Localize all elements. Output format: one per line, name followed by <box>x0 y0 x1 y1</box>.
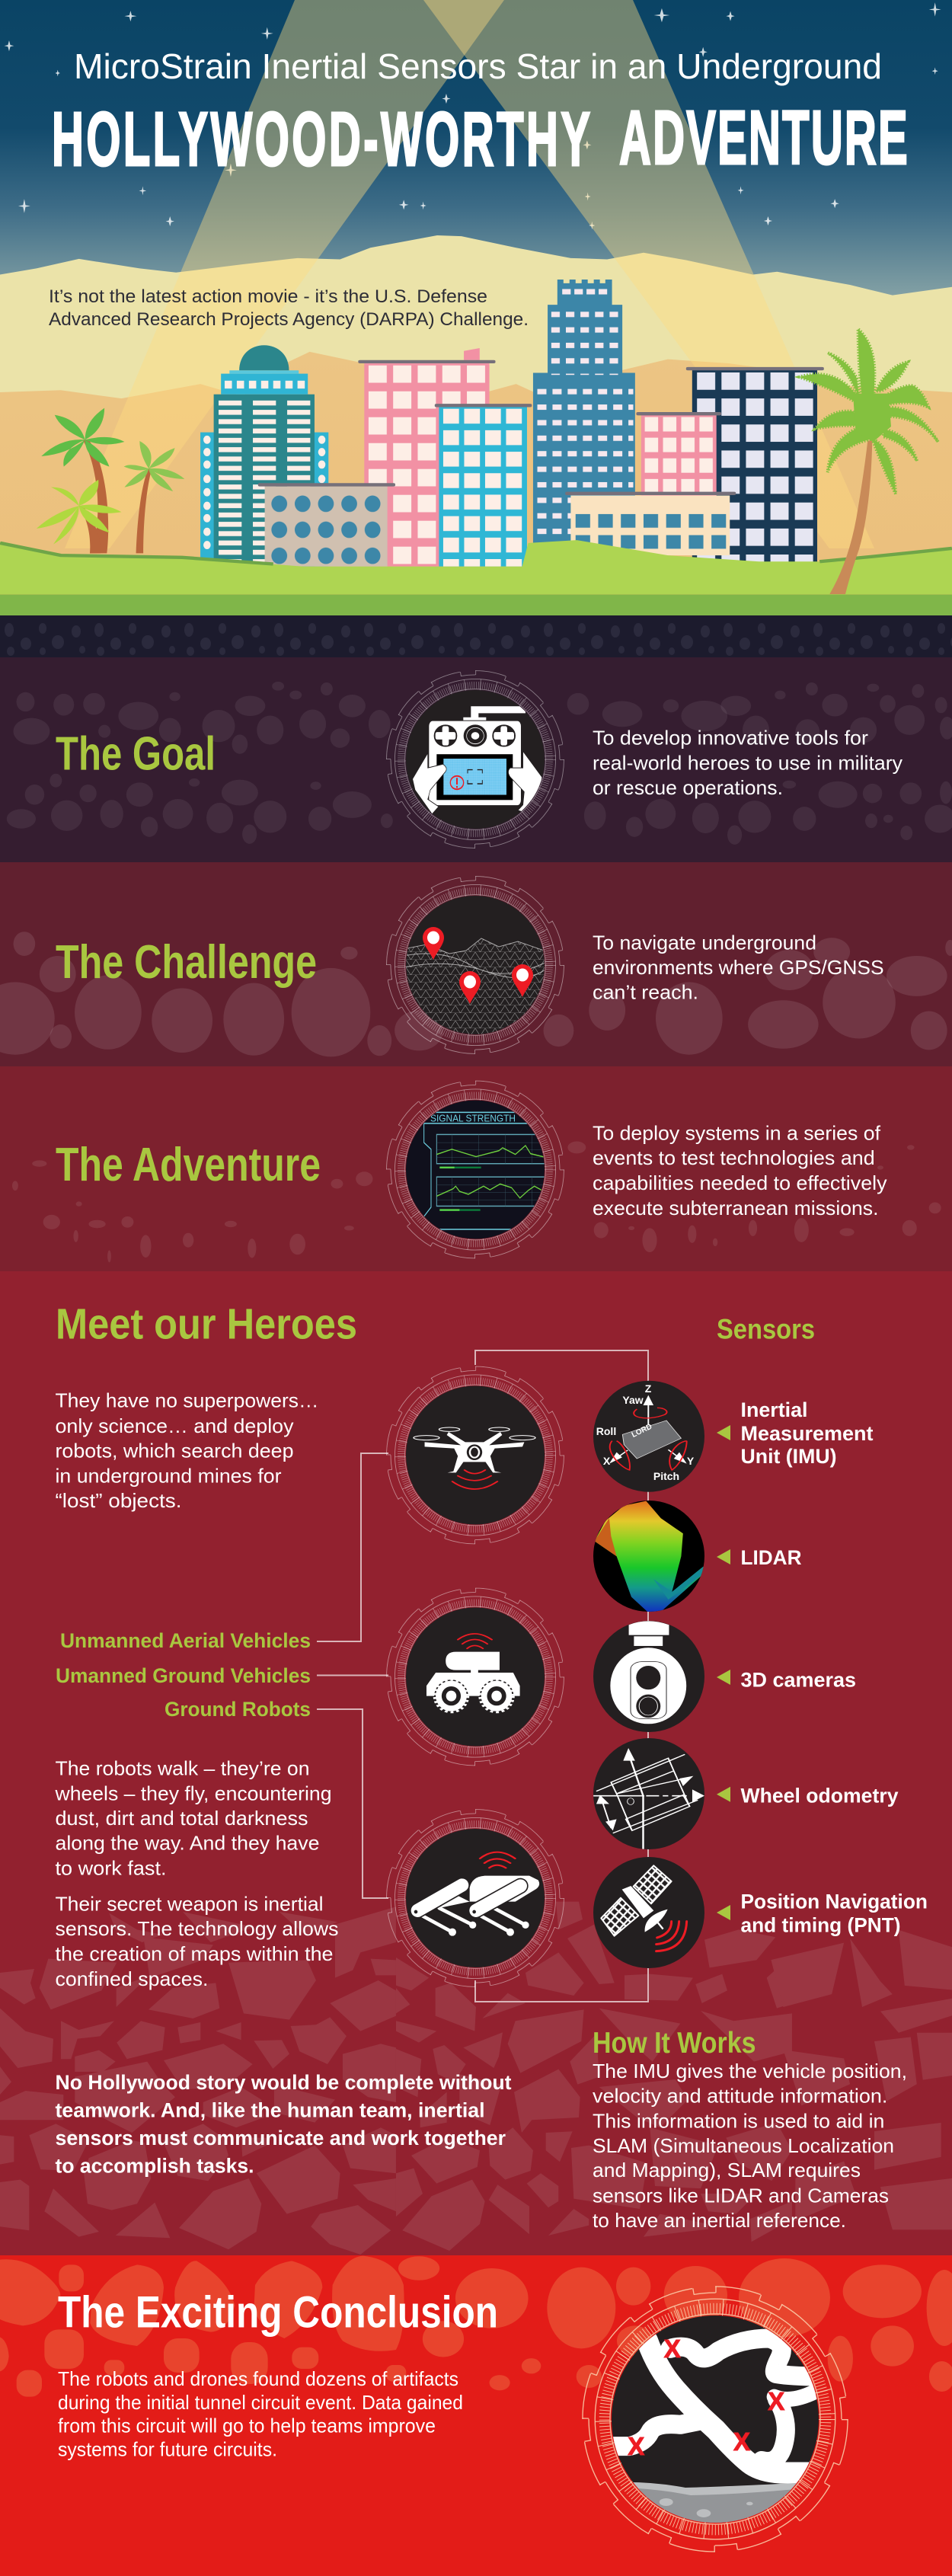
how it works: sensors like LIDAR and Cameras <box>593 2184 889 2207</box>
robots text: along the way. And they have <box>55 1831 320 1854</box>
icon: ground vehicle <box>387 1588 564 1766</box>
sensor: wheel odometry <box>593 1738 704 1849</box>
sensor labels: 3D cameras <box>740 1668 856 1691</box>
sensor: IMU: Y <box>687 1455 695 1467</box>
goal description: real-world heroes to use in military <box>593 751 902 774</box>
intro text: robots, which search deep <box>55 1440 294 1462</box>
grass hill <box>0 540 952 595</box>
panel: the exciting conclusion <box>0 2255 952 2576</box>
intro text: It’s not the latest action movie - it’s the U.S. Defense <box>49 286 487 307</box>
icon: walking robot <box>387 1810 564 1986</box>
rock flakes <box>12 1142 941 1262</box>
goal description <box>593 727 902 799</box>
building: cyan tower <box>435 404 532 567</box>
how it works: SLAM (Simultaneous Localization <box>593 2134 894 2157</box>
how it works: This information is used to aid in <box>593 2110 884 2133</box>
heading: The Goal <box>56 727 216 780</box>
building: tan block with round windows <box>258 483 395 567</box>
how it works: The IMU gives the vehicle position, <box>593 2060 907 2082</box>
icon: signal strength monitor <box>387 1081 564 1258</box>
hero category labels <box>56 1629 311 1721</box>
intro text <box>55 1389 318 1512</box>
artifact markers: X <box>733 2427 750 2456</box>
building: teal domed tower <box>200 345 328 567</box>
sensor labels: LIDAR <box>740 1546 801 1569</box>
adventure description <box>593 1121 887 1219</box>
sensor: IMU: Z <box>645 1382 652 1395</box>
teamwork text: teamwork. And, like the human team, inertial <box>55 2099 484 2122</box>
how it works: to have an inertial reference. <box>593 2209 846 2232</box>
ground strip <box>0 595 952 616</box>
robots text <box>54 1756 331 1879</box>
hero category labels: Unmanned Aerial Vehicles <box>60 1629 311 1652</box>
stone texture <box>0 1902 952 2255</box>
sensor: IMU: Pitch <box>653 1470 679 1482</box>
rock texture <box>0 932 952 1056</box>
icon: signal strength monitor: SIGNAL STRENGTH <box>430 1112 516 1124</box>
sensor labels: Measurement <box>740 1422 873 1445</box>
robots text: dust, dirt and total darkness <box>55 1807 308 1830</box>
heading: The Exciting Conclusion <box>58 2288 498 2338</box>
sensor: positioning satellite <box>593 1857 704 1968</box>
robots text: wheels – they fly, encountering <box>54 1782 331 1805</box>
heading: Meet our Heroes <box>56 1299 357 1348</box>
goal description: or rescue operations. <box>593 776 783 799</box>
heading: The Adventure <box>56 1139 321 1191</box>
city buildings <box>0 280 952 616</box>
sensor labels: Inertial <box>740 1398 807 1421</box>
goal description: To develop innovative tools for <box>593 727 868 749</box>
challenge description <box>593 931 884 1004</box>
intro text: in underground mines for <box>55 1464 282 1487</box>
intro text: “lost” objects. <box>55 1489 181 1512</box>
how it works: How It Works <box>593 2027 756 2060</box>
title line: MicroStrain Inertial Sensors Star in an Underground <box>74 46 882 86</box>
teamwork text: sensors must communicate and work together <box>55 2127 506 2149</box>
sensor: IMU: Yaw <box>622 1394 644 1406</box>
rock texture <box>7 682 952 845</box>
icon: tunnel map <box>583 2287 848 2552</box>
title: Hollywood-worthy adventure: ADVENTURE <box>619 96 908 181</box>
adventure description: To deploy systems in a series of <box>593 1121 881 1144</box>
intro text <box>49 286 529 330</box>
building: blue tower <box>533 280 635 546</box>
orange foothills <box>0 352 952 595</box>
secret weapon text: Their secret weapon is inertial <box>55 1892 323 1915</box>
pale mountain range <box>0 235 952 595</box>
secret weapon text: confined spaces. <box>55 1967 209 1990</box>
conclusion text: from this circuit will go to help teams improve <box>58 2415 436 2437</box>
artifact markers: X <box>664 2335 681 2363</box>
dark rock strip <box>0 615 952 658</box>
intro text: only science… and deploy <box>55 1414 294 1437</box>
challenge description: To navigate underground <box>593 931 816 954</box>
building: cream block <box>565 492 736 555</box>
adventure description: events to test technologies and <box>593 1146 875 1169</box>
sensor labels: and timing (PNT) <box>740 1913 900 1936</box>
panel: the challenge <box>0 862 952 1067</box>
teamwork text: to accomplish tasks. <box>55 2155 254 2178</box>
secret weapon text <box>55 1892 338 1990</box>
artifact markers: X <box>628 2432 644 2460</box>
building: pink tower <box>358 348 496 567</box>
teamwork text <box>55 2071 512 2178</box>
panel: meet our heroes <box>0 1271 952 2255</box>
sensor labels: Position Navigation <box>740 1890 928 1913</box>
robots text: to work fast. <box>55 1856 166 1879</box>
icon: wireframe terrain with pins <box>387 877 564 1053</box>
hero category labels: Ground Robots <box>165 1698 311 1721</box>
sensor: 3D camera <box>593 1621 704 1732</box>
tunnels <box>607 2338 823 2473</box>
how it works: and Mapping), SLAM requires <box>593 2159 861 2181</box>
stars <box>5 2 941 229</box>
panel: the adventure <box>0 1066 952 1271</box>
robots text: The robots walk – they’re on <box>55 1756 309 1779</box>
title: Hollywood-worthy adventure: HOLLYWOOD-WORTHY <box>52 97 590 182</box>
panel: the goal <box>0 657 952 862</box>
teamwork text: No Hollywood story would be complete without <box>55 2071 512 2094</box>
title: Hollywood-worthy adventure <box>52 96 908 182</box>
connector lines <box>317 1350 648 2002</box>
adventure description: execute subterranean missions. <box>593 1197 879 1219</box>
sensor: IMU: Roll <box>596 1425 616 1437</box>
large palm tree <box>799 329 938 594</box>
conclusion text: systems for future circuits. <box>58 2437 277 2460</box>
conclusion text <box>58 2367 463 2460</box>
conclusion text: The robots and drones found dozens of artifacts <box>58 2367 458 2390</box>
sensor labels <box>740 1398 928 1936</box>
sensor: IMU <box>593 1381 704 1492</box>
sensor: IMU: LORD <box>631 1423 653 1440</box>
sensor pointer arrows <box>717 1425 730 1920</box>
icon: remote controller with hands <box>387 671 564 848</box>
sensor labels: Unit (IMU) <box>740 1445 836 1468</box>
heading: The Challenge <box>56 936 317 989</box>
panel: hero city scene <box>0 0 952 616</box>
challenge description: can’t reach. <box>593 981 698 1004</box>
how it works <box>593 2027 907 2232</box>
scenery and skyline <box>0 235 952 595</box>
sensor labels: Wheel odometry <box>740 1784 899 1807</box>
hero category labels: Umanned Ground Vehicles <box>56 1664 311 1687</box>
adventure description: capabilities needed to effectively <box>593 1171 887 1194</box>
icon: aerial drone <box>387 1366 564 1544</box>
sensor: IMU: X <box>603 1455 611 1467</box>
intro text: Advanced Research Projects Agency (DARPA) Challenge. <box>49 309 529 330</box>
map pins <box>423 927 533 1004</box>
artifact markers <box>628 2335 784 2460</box>
how it works: velocity and attitude information. <box>593 2084 887 2107</box>
intro text: They have no superpowers… <box>55 1389 318 1412</box>
sensors heading: Sensors <box>717 1313 815 1345</box>
sensor: LIDAR scan <box>593 1501 704 1612</box>
secret weapon text: the creation of maps within the <box>55 1942 334 1965</box>
small palms <box>37 408 184 553</box>
rock texture <box>0 2256 952 2397</box>
challenge description: environments where GPS/GNSS <box>593 956 884 979</box>
searchlight beams <box>65 0 874 548</box>
building: navy tower <box>686 367 824 564</box>
secret weapon text: sensors. The technology allows <box>55 1917 338 1940</box>
conclusion text: during the initial tunnel circuit event. Data gained <box>58 2391 463 2414</box>
artifact markers: X <box>768 2387 784 2415</box>
building: small pink block <box>636 412 721 497</box>
cavern floor <box>633 2482 797 2523</box>
